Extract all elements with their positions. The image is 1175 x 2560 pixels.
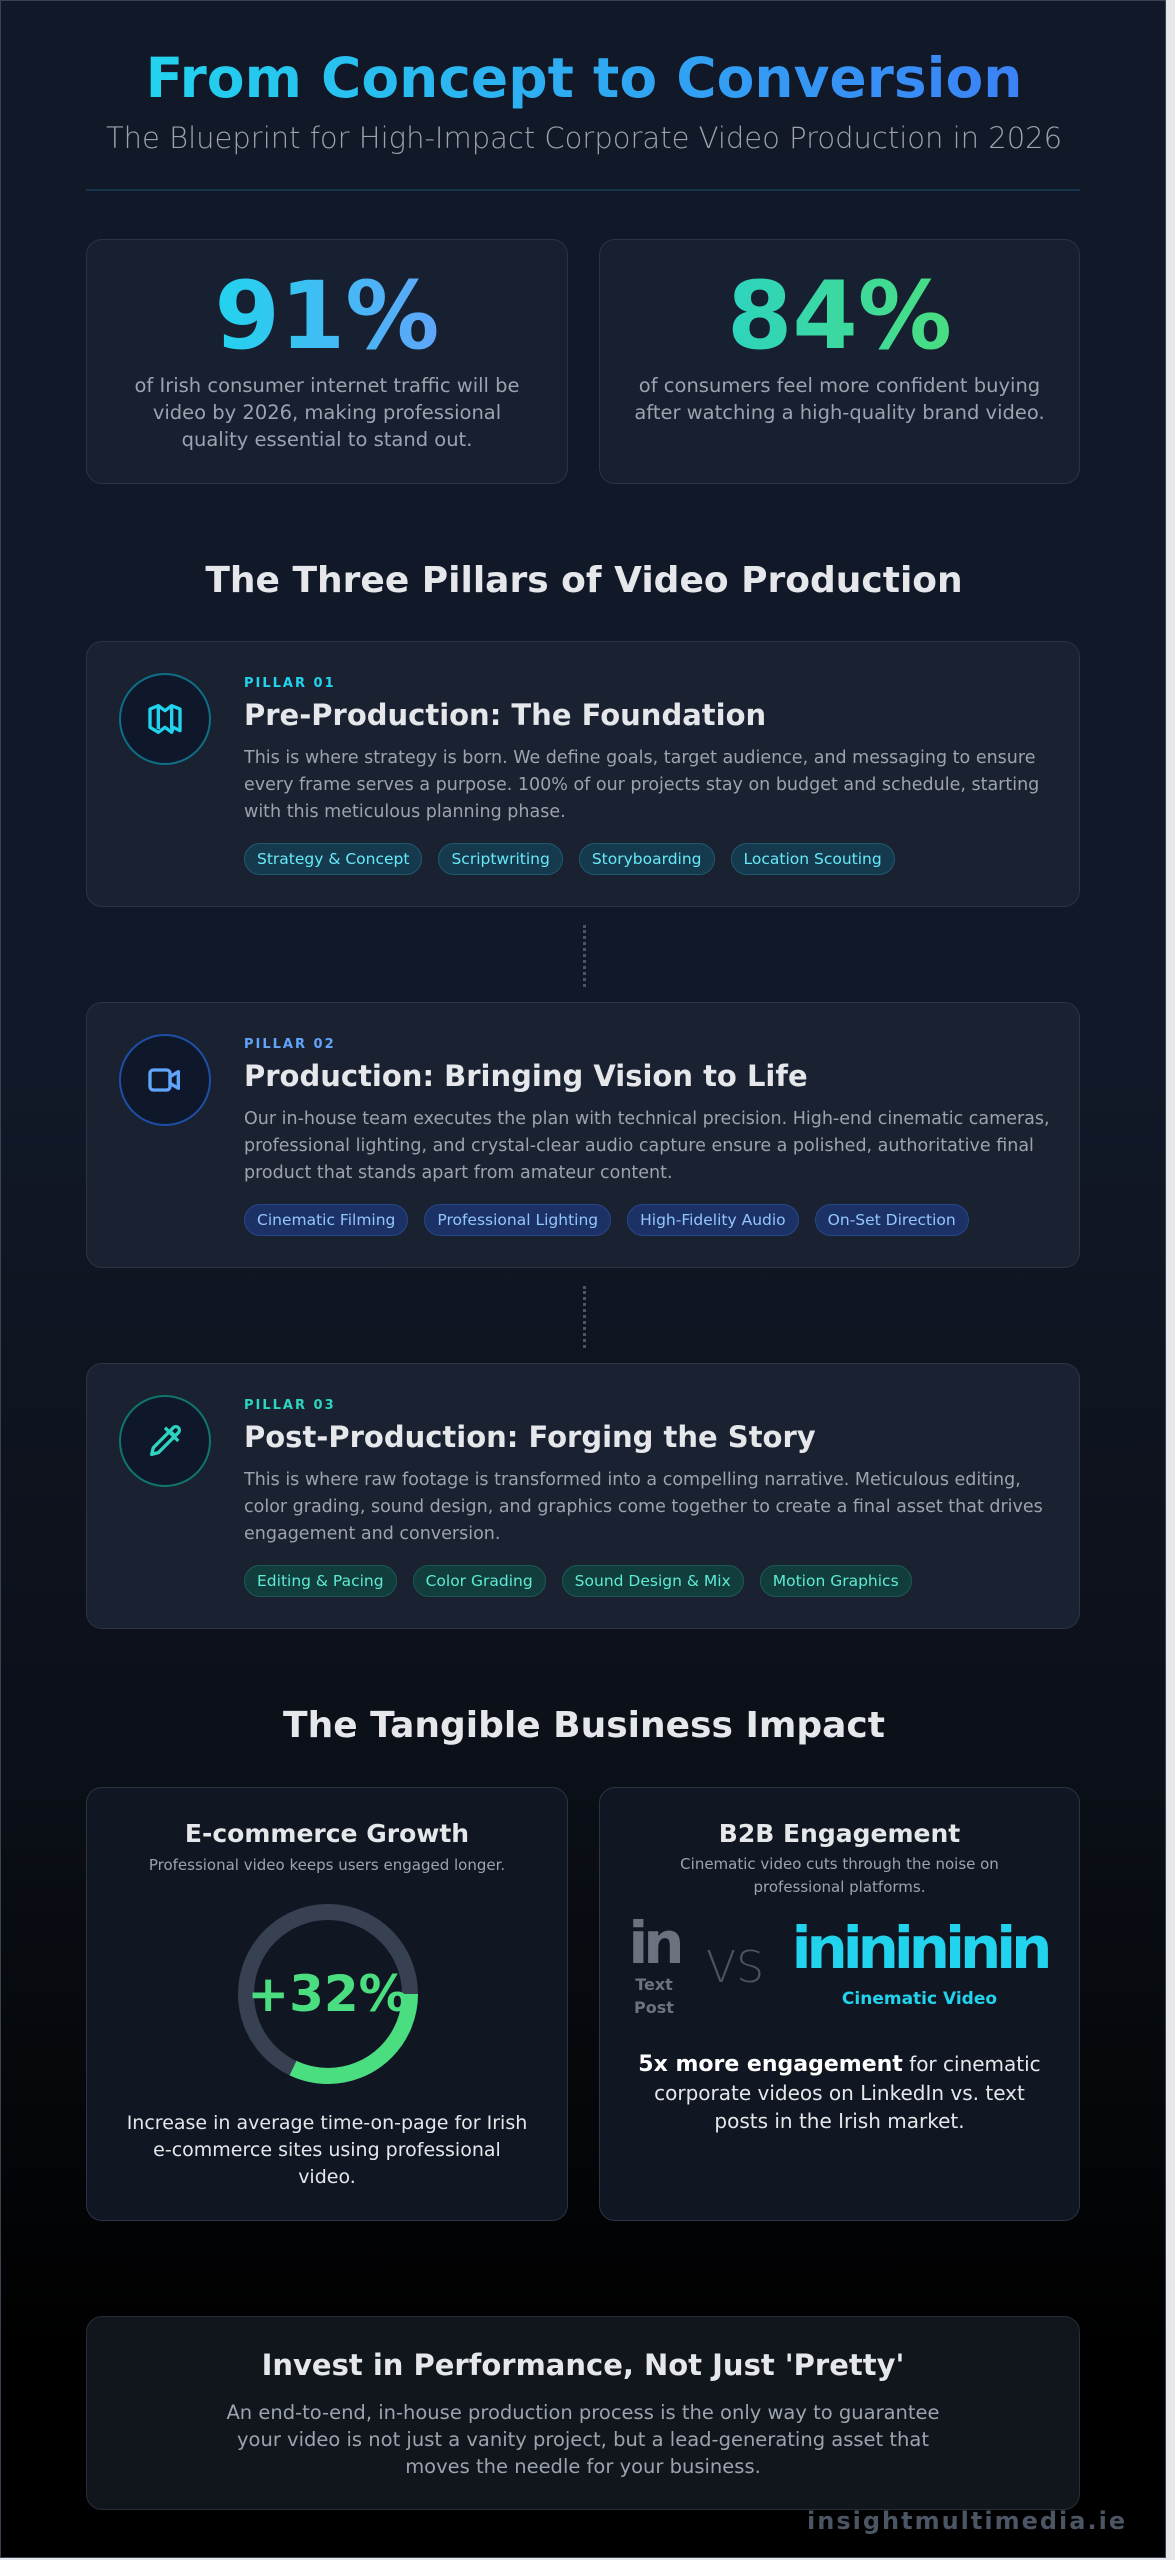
description: 5x more engagement for cinematic — [638, 2052, 1041, 2077]
stat description: video by 2026, making professional — [153, 401, 501, 424]
subtitle: The Blueprint for High-Impact Corporate Video Production in 2026 — [106, 121, 1062, 155]
title: From Concept to Conversion — [146, 46, 1022, 110]
comparison graphic — [628, 1909, 1048, 2017]
description — [244, 1109, 1050, 1183]
description: e-commerce sites using professional — [153, 2139, 501, 2161]
description: Increase in average time-on-page for Irish — [127, 2112, 527, 2134]
stat description: of consumers feel more confident buying — [639, 374, 1040, 397]
card title: E-commerce Growth — [185, 1819, 469, 1848]
tags: Color Grading — [426, 1572, 533, 1590]
cta title: Invest in Performance, Not Just 'Pretty' — [262, 2348, 904, 2382]
panel: e-commerce growth — [86, 1787, 568, 2221]
text post: in — [628, 1909, 680, 1977]
cta text: your video is not just a vanity project, but a lead-generating asset that — [237, 2428, 929, 2451]
description: engagement and conversion. — [244, 1524, 500, 1544]
pillar title: Production: Bringing Vision to Life — [244, 1059, 808, 1093]
description — [244, 1470, 1043, 1544]
label: PILLAR 01 — [244, 676, 336, 691]
description: color grading, sound design, and graphics come together to create a final asset that drives — [244, 1497, 1043, 1517]
text post: Text — [635, 1975, 673, 1994]
tags — [244, 843, 895, 875]
label: PILLAR 03 — [244, 1398, 336, 1413]
card title: B2B Engagement — [719, 1819, 960, 1848]
tags: Storyboarding — [592, 850, 702, 868]
pillar title: Post-Production: Forging the Story — [244, 1420, 816, 1454]
pillar title: Pre-Production: The Foundation — [244, 698, 766, 732]
panel: pillar 03 — [86, 1363, 1080, 1629]
stat number 91%: 91% — [214, 262, 440, 371]
description: video. — [298, 2166, 356, 2188]
tags — [244, 1204, 969, 1236]
stat description — [634, 374, 1045, 424]
cinematic video: Cinematic Video — [842, 1989, 997, 2009]
heading: three pillars: The Three Pillars of Video Production — [205, 560, 963, 601]
description: with this meticulous planning phase. — [244, 802, 566, 822]
tags: Location Scouting — [744, 850, 882, 868]
vs: VS — [706, 1942, 764, 1993]
text post: Post — [634, 1998, 674, 2017]
description: every frame serves a purpose. 100% of our projects stay on budget and schedule, starting — [244, 775, 1039, 795]
stat description: of Irish consumer internet traffic will be — [134, 374, 520, 397]
panel: B2B engagement — [599, 1787, 1080, 2221]
card subtitle: professional platforms. — [754, 1878, 925, 1896]
stat card: 91% — [86, 239, 568, 484]
description — [127, 2112, 527, 2188]
stat description: after watching a high-quality brand video. — [634, 401, 1045, 424]
card subtitle — [680, 1855, 999, 1896]
label: PILLAR 02 — [244, 1037, 336, 1052]
donut chart — [238, 1904, 418, 2084]
tags: Professional Lighting — [437, 1211, 598, 1229]
description — [638, 2052, 1041, 2133]
tags: On-Set Direction — [828, 1211, 956, 1229]
description: This is where raw footage is transformed into a compelling narrative. Meticulous editing, — [244, 1470, 1021, 1490]
tags: Sound Design & Mix — [575, 1572, 731, 1590]
tags: Motion Graphics — [773, 1572, 899, 1590]
tags: Scriptwriting — [451, 850, 550, 868]
cta text: moves the needle for your business. — [405, 2455, 761, 2478]
tags: Cinematic Filming — [257, 1211, 395, 1229]
description — [244, 748, 1039, 822]
panel: pillar 02 — [86, 1002, 1080, 1268]
card subtitle: Cinematic video cuts through the noise on — [680, 1855, 999, 1873]
connector — [583, 925, 586, 987]
icon: map — [119, 673, 211, 765]
icon: video camera — [119, 1034, 211, 1126]
panel: pillar 01 — [86, 641, 1080, 907]
stat description — [134, 374, 520, 451]
footer brand: insightmultimedia.ie — [807, 2507, 1127, 2535]
tags: Strategy & Concept — [257, 850, 409, 868]
description: posts in the Irish market. — [714, 2109, 965, 2133]
icon: pen tool — [119, 1395, 211, 1487]
stat card: 84% — [599, 239, 1080, 484]
stat number 84%: 84% — [727, 262, 952, 371]
cinematic video: ininininin — [792, 1914, 1047, 1982]
cta text — [226, 2401, 940, 2478]
card subtitle: Professional video keeps users engaged longer. — [149, 1856, 505, 1874]
connector — [583, 1286, 586, 1348]
description: product that stands apart from amateur content. — [244, 1163, 673, 1183]
panel: call to action — [86, 2316, 1080, 2510]
description: This is where strategy is born. We define goals, target audience, and messaging to ensure — [244, 748, 1035, 768]
description: corporate videos on LinkedIn vs. text — [654, 2081, 1025, 2105]
cta text: An end-to-end, in-house production process is the only way to guarantee — [226, 2401, 940, 2424]
tags: Editing & Pacing — [257, 1572, 384, 1590]
description: professional lighting, and crystal-clear audio capture ensure a polished, authoritative final — [244, 1136, 1034, 1156]
tags: High-Fidelity Audio — [640, 1211, 786, 1229]
donut chart: +32% — [247, 1965, 409, 2023]
tags — [244, 1565, 912, 1597]
heading: business impact: The Tangible Business Impact — [283, 1705, 885, 1746]
stat description: quality essential to stand out. — [182, 428, 472, 451]
description: Our in-house team executes the plan with technical precision. High-end cinematic cameras, — [244, 1109, 1050, 1129]
text post — [628, 1909, 680, 2017]
